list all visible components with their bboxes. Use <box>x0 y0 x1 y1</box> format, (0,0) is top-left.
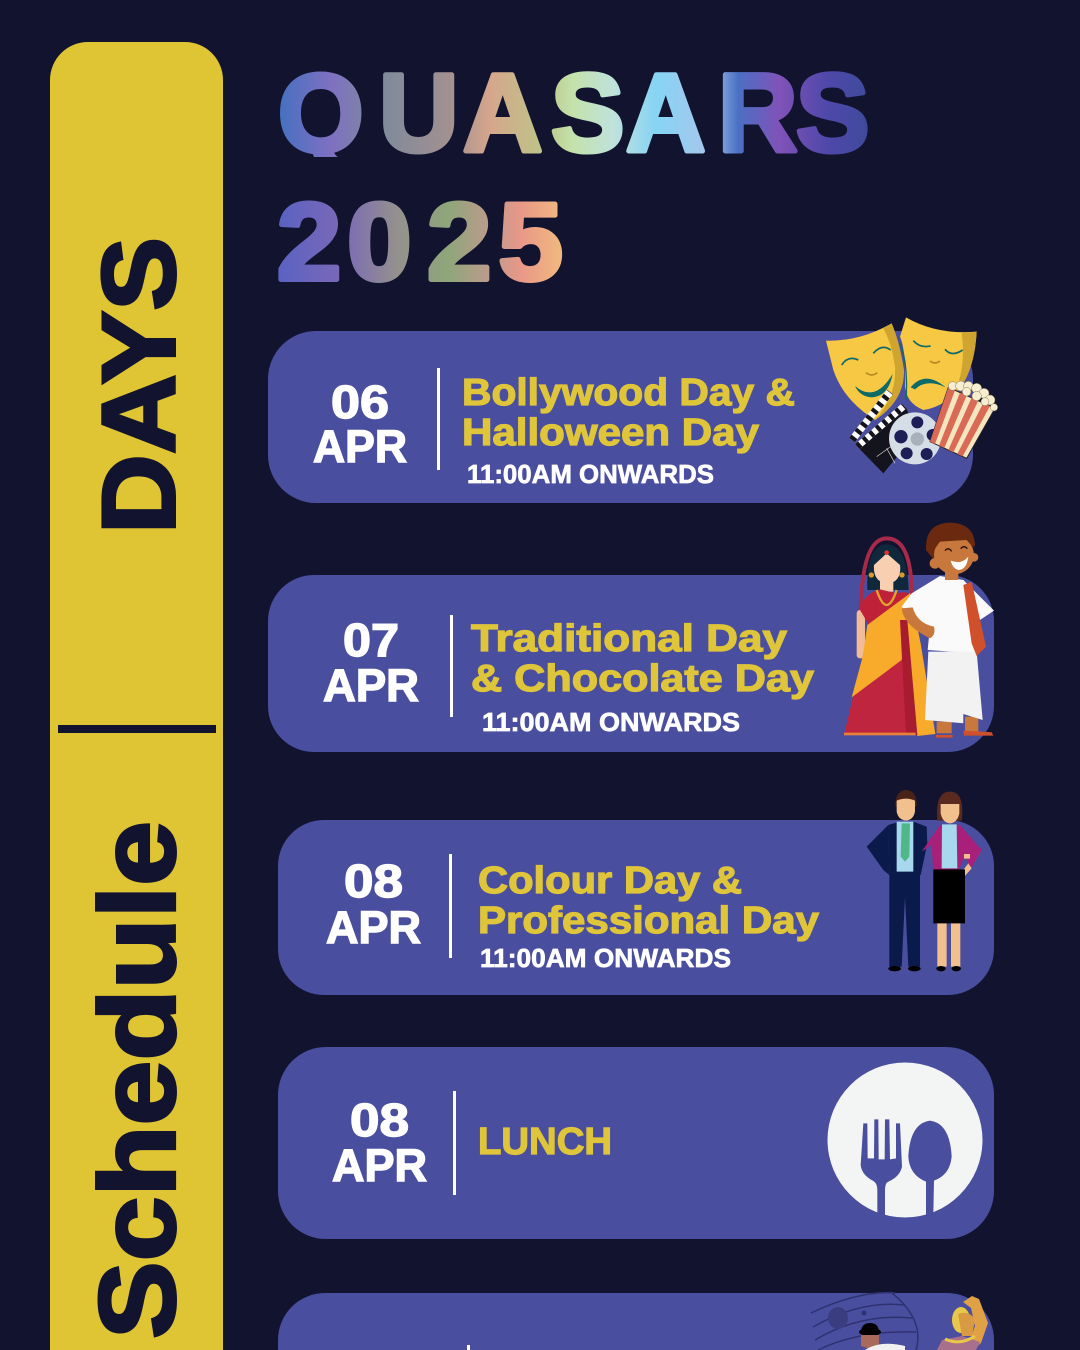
icon: fork and spoon on plate <box>828 1062 982 1218</box>
event name: LUNCH <box>478 1121 612 1163</box>
panel: 06 Apr Bollywood and Halloween Day <box>268 317 998 503</box>
time: 11:00AM ONWARDS <box>482 707 740 737</box>
date: 07 APR: 07 <box>343 614 399 666</box>
event name: Traditional Day <box>471 618 787 660</box>
date: 06 APR <box>313 376 407 472</box>
date: 08 APR <box>332 1094 427 1191</box>
event name: Professional Day <box>478 900 819 942</box>
event name <box>471 618 814 700</box>
event name <box>478 860 819 942</box>
event name <box>462 372 795 454</box>
date: 07 APR: APR <box>323 660 419 711</box>
time: 11:00AM ONWARDS <box>480 943 731 973</box>
panel: next event, cropped at page edge <box>278 1293 994 1350</box>
time: 11:00AM ONWARDS <box>467 459 714 489</box>
event name: Colour Day & <box>478 860 742 902</box>
date: 08 APR: APR <box>332 1140 427 1191</box>
title <box>278 71 868 283</box>
icon: music sheet and dancers <box>811 1293 988 1350</box>
date: 06 APR: APR <box>313 421 407 472</box>
panel: 08 Apr Lunch <box>278 1047 994 1239</box>
date: 06 APR: 06 <box>331 376 389 428</box>
sidebar: Days Schedule <box>50 42 223 1350</box>
panel: 08 Apr Colour and Professional Day <box>278 790 994 995</box>
sidebar label: Schedule: Schedule <box>76 821 198 1339</box>
event name: & Chocolate Day <box>471 658 814 700</box>
icon: couple in traditional dress <box>844 523 994 738</box>
date: 08 APR: 08 <box>344 855 403 907</box>
sidebar label: DAYS: DAYS <box>82 237 198 534</box>
date: 08 APR: 08 <box>350 1094 409 1146</box>
event name: Bollywood Day & <box>462 372 795 414</box>
title line: QUASARS: QUASARS <box>278 52 869 175</box>
date: 08 APR: APR <box>326 902 421 953</box>
event name: Halloween Day <box>462 412 759 454</box>
date: 07 APR <box>323 614 419 711</box>
icon: two professionals <box>867 790 982 971</box>
icon: theatre masks, clapperboard, film reel and popcorn <box>826 317 998 473</box>
date: 08 APR <box>326 855 421 953</box>
panel: 07 Apr Traditional and Chocolate Day <box>268 523 994 752</box>
title line: 2025: 2025 <box>277 180 563 303</box>
